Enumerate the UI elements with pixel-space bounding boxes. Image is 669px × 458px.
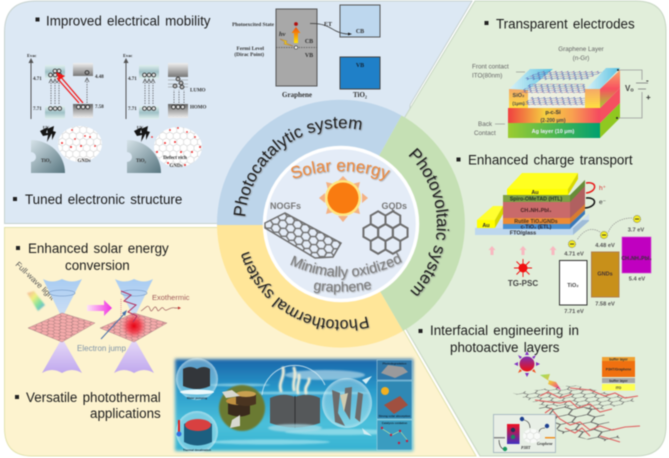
bolt	[540, 374, 561, 390]
axis: Evac	[123, 53, 133, 58]
TiO2 box: TiO₂	[567, 283, 579, 289]
energy level diagram	[560, 215, 652, 315]
ring: green sector	[341, 116, 465, 331]
layer stack: buffer layer	[609, 358, 628, 362]
Ag layer: Ag layer (10 μm)	[532, 129, 575, 135]
heading: enhanced solar energy conversion: conversion	[65, 258, 130, 273]
minimally oxidized graphene label: Minimally oxidized	[290, 252, 403, 282]
band diagram: TiO2 and GNDs: 7.71	[33, 107, 42, 112]
band diagram: TiO2 and GNDs: 4.48	[95, 75, 104, 80]
heading: enhanced solar energy conversion	[16, 241, 169, 273]
electrons	[568, 215, 641, 248]
device: perovskite solar cell stack	[475, 173, 607, 288]
heading: improved electrical mobility: Improved electrical mobility	[46, 14, 211, 28]
electron jump arrow: Electron jump	[77, 344, 126, 353]
electron jump arrow	[77, 310, 127, 353]
panel: photocatalytic background	[4, 1, 472, 224]
energy level diagram: 7.71 eV	[564, 309, 584, 315]
minimally oxidized graphene label: graphene	[313, 281, 372, 296]
device: graphene solar cell: (n-Gr)	[573, 55, 589, 62]
graphic: TiO2 with defect-rich GNDs: UV	[137, 125, 144, 130]
center circle	[262, 145, 420, 303]
side panels: Catalysis oxidation	[382, 421, 408, 425]
ring: yellow sector	[217, 224, 403, 348]
side panels: Photodegradation	[383, 362, 407, 366]
side panels	[377, 360, 412, 450]
axis: Evac	[27, 53, 37, 58]
energy diagram: graphene and TiO2: Graphene	[282, 91, 312, 99]
solar energy title: Solar energy	[290, 160, 392, 182]
stack layers: c-TiO₂ (ETL)	[521, 224, 552, 230]
side panels: Strong solar absorption	[379, 414, 411, 418]
graphic: TiO2 with GNDs	[26, 125, 102, 173]
circular ring	[216, 100, 466, 348]
heading: versatile photothermal applications: Versatile photothermal	[26, 390, 161, 405]
red sun	[514, 259, 532, 277]
dome and central cylinders	[262, 365, 325, 432]
NOGFs sheet	[265, 213, 341, 258]
energy level diagram: 3.7 eV	[628, 228, 644, 234]
energy diagram: graphene and TiO2: Fermi Level	[236, 46, 265, 52]
energy diagram: graphene and TiO2	[232, 5, 380, 99]
ring: blue sector	[217, 100, 402, 225]
energy diagram: graphene and TiO2: Photoexcited State	[232, 22, 275, 28]
circle: water pumping	[176, 358, 218, 400]
circle: water pumping: Water pumping	[187, 396, 207, 400]
label: photocatalytic system: Photocatalytic system	[232, 116, 363, 218]
energy level diagram: 7.58 eV	[595, 302, 615, 308]
red arrows	[56, 72, 83, 103]
exothermic wave	[141, 293, 190, 311]
heading: transparent electrodes: Transparent electrodes	[496, 16, 635, 32]
graphic: TiO2 with defect-rich GNDs: Defect rich	[163, 156, 187, 161]
p-c-Si layer	[508, 88, 620, 124]
p-c-Si layer: p-c-Si	[545, 110, 561, 116]
circle: thermal ablation: Thermal desalination	[183, 448, 211, 452]
layer stack: buffer layer	[609, 379, 628, 383]
band diagram: TiO2 and GNDs	[27, 53, 104, 119]
FTO glass: FTO/glass	[510, 230, 536, 236]
heading: enhanced charge transport: Enhanced charge transport	[468, 152, 633, 168]
device: graphene solar cell: +	[646, 93, 651, 102]
perovskite box: CH₃NH₃PbI₃	[621, 256, 652, 262]
band diagram: TiO2 and GNDs: 7.58	[95, 105, 104, 110]
device: perovskite solar cell stack: h⁺	[599, 185, 607, 192]
heading: interfacial engineering: photoactive layers	[450, 340, 560, 355]
water streaks	[210, 370, 395, 444]
panel: photothermal background	[4, 228, 476, 456]
heading: enhanced solar energy conversion: Enhanced solar energy	[28, 241, 169, 256]
circle: thermal ablation	[176, 411, 218, 453]
GQDs label: GQDs	[382, 201, 407, 211]
light arrows	[488, 246, 556, 255]
electron transfer arrow	[310, 22, 352, 36]
right cone pair	[100, 279, 167, 373]
dirac cone illustration	[14, 260, 190, 373]
circle: flakes	[322, 376, 372, 436]
TiO2 conduction band	[340, 5, 380, 37]
layer stack	[602, 357, 635, 390]
full-wave light label: Full-wave light	[14, 260, 57, 302]
ocean background	[175, 359, 413, 451]
stack layers	[503, 180, 585, 230]
ITO strips	[509, 68, 620, 90]
device: perovskite solar cell stack: TG-PSC	[508, 279, 538, 288]
band diagram: TiO2 and defect-rich GQDs: LUMO	[190, 88, 206, 94]
graphic: TiO2 with defect-rich GNDs: GNDs	[169, 164, 183, 169]
SiO2 blocks: SiO₂	[513, 93, 525, 99]
stack layers: CH₃NH₃PbI₃	[521, 208, 552, 214]
circle: wood	[219, 385, 265, 431]
graphene mesh	[513, 385, 640, 442]
graphene band box: hν	[279, 31, 286, 38]
sun icon	[319, 176, 368, 222]
TiO2 valence band: VB	[356, 63, 364, 69]
Au side electrode: Au	[482, 223, 490, 229]
heading: versatile photothermal applications: applications	[90, 406, 161, 421]
stack layers: Spiro-OMeTAD (HTL)	[510, 196, 563, 202]
device: graphene solar cell	[472, 46, 651, 138]
graphic: TiO2 with GNDs: GNDs	[77, 159, 91, 164]
band diagram: TiO2 and GNDs: 4.71	[33, 77, 42, 82]
device: graphene solar cell: ITO(80nm)	[472, 72, 502, 80]
graphic: TiO2 with GNDs: UV	[43, 125, 50, 130]
polymer chains	[535, 388, 640, 442]
device: perovskite solar cell stack: e⁻	[599, 199, 607, 206]
device: graphene solar cell: Contact	[474, 130, 496, 137]
GQD hexagon cluster	[363, 211, 408, 254]
photo panel: photothermal applications	[175, 358, 413, 453]
graphene with polymer illustration	[494, 351, 640, 452]
energy level diagram: 4.48 eV	[595, 243, 615, 249]
label: photovoltaic system: Photovoltaic system	[408, 147, 450, 297]
TiO2 conduction band: CB	[356, 29, 364, 35]
inset schematic: P3HT	[521, 446, 531, 450]
device: graphene solar cell: Graphene Layer	[558, 46, 604, 53]
heading: interfacial engineering	[418, 323, 579, 355]
graphene band box: VB	[305, 53, 313, 59]
sun icon	[514, 351, 540, 377]
heading: interfacial engineering: Interfacial engineering in	[430, 323, 579, 338]
device: graphene solar cell: Front contact	[472, 64, 509, 70]
band diagram: TiO2 and defect-rich GQDs: 7.71	[128, 107, 137, 112]
heading: tuned electronic structure: Tuned electronic structure	[25, 192, 182, 207]
rainbow light beam	[27, 291, 45, 311]
layer stack: P3HT/Graphene	[606, 368, 631, 372]
p-c-Si layer: (2-200 μm)	[540, 118, 566, 124]
graphene sheets	[520, 71, 604, 105]
SiO2 blocks	[509, 70, 620, 108]
stack layers: Rutile TiO₂/GNDs	[514, 219, 558, 225]
graphic: TiO2 with GNDs: TiO₂	[41, 159, 52, 164]
band diagram: TiO2 and defect-rich GQDs: 4.71	[128, 77, 137, 82]
GNDs box: GNDs	[597, 272, 613, 278]
device: graphene solar cell: -	[646, 76, 649, 85]
inset schematic: Graphene	[537, 442, 553, 446]
graphene band box: CB	[305, 39, 313, 45]
energy level diagram: 5.4 eV	[629, 276, 645, 282]
Ag layer	[508, 103, 620, 138]
inset schematic	[494, 414, 556, 452]
left cone pair	[28, 279, 95, 373]
energy level diagram: 4.71 eV	[564, 252, 584, 258]
panel: photovoltaic background	[385, 1, 666, 456]
electron transfer arrow: ET	[324, 22, 332, 28]
layer stack: ITO	[616, 386, 622, 390]
NOGFs label: NOGFs	[270, 201, 301, 211]
graphic: TiO2 with defect-rich GNDs: TiO₂	[136, 159, 147, 164]
Au top electrode: Au	[531, 190, 539, 196]
exothermic wave: Exothermic	[152, 293, 190, 302]
wavy excitation line	[121, 291, 137, 322]
graphene band box	[276, 9, 317, 86]
hole and electron arrows	[585, 183, 595, 208]
energy diagram: graphene and TiO2: TiO₂	[353, 91, 367, 99]
label: photothermal system: Photothermal system	[240, 251, 370, 332]
energy diagram: graphene and TiO2: (Dirac Point)	[234, 51, 264, 58]
TiO2 valence band	[340, 57, 380, 89]
device: graphene solar cell: Vₒ	[625, 84, 634, 93]
voltage wires	[617, 70, 648, 118]
SiO2 blocks: (1μm)	[512, 101, 525, 106]
pink arrow	[87, 300, 112, 316]
band diagram: TiO2 and defect-rich GQDs	[123, 53, 206, 119]
device: graphene solar cell: Back	[478, 121, 493, 128]
graphic: TiO2 with defect-rich GNDs	[122, 125, 202, 173]
heading: versatile photothermal applications	[15, 390, 161, 421]
minimally oxidized graphene label	[290, 252, 403, 296]
band diagram: TiO2 and defect-rich GQDs: HOMO	[190, 106, 206, 110]
